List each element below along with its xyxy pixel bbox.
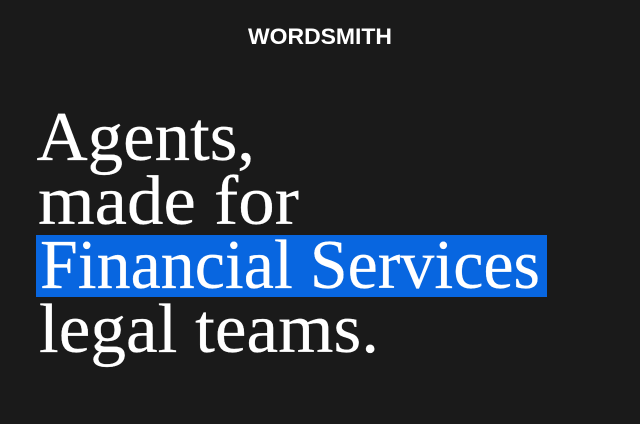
heading line: Agents,: Agents, [36, 99, 255, 176]
heading line: made for: made for [38, 163, 299, 240]
heading line: Financial Services: Financial Services [40, 227, 540, 304]
highlight bar [36, 235, 547, 297]
logo: WORDSMITH: WORDSMITH [248, 24, 392, 49]
heading line: legal teams.: legal teams. [39, 291, 379, 368]
